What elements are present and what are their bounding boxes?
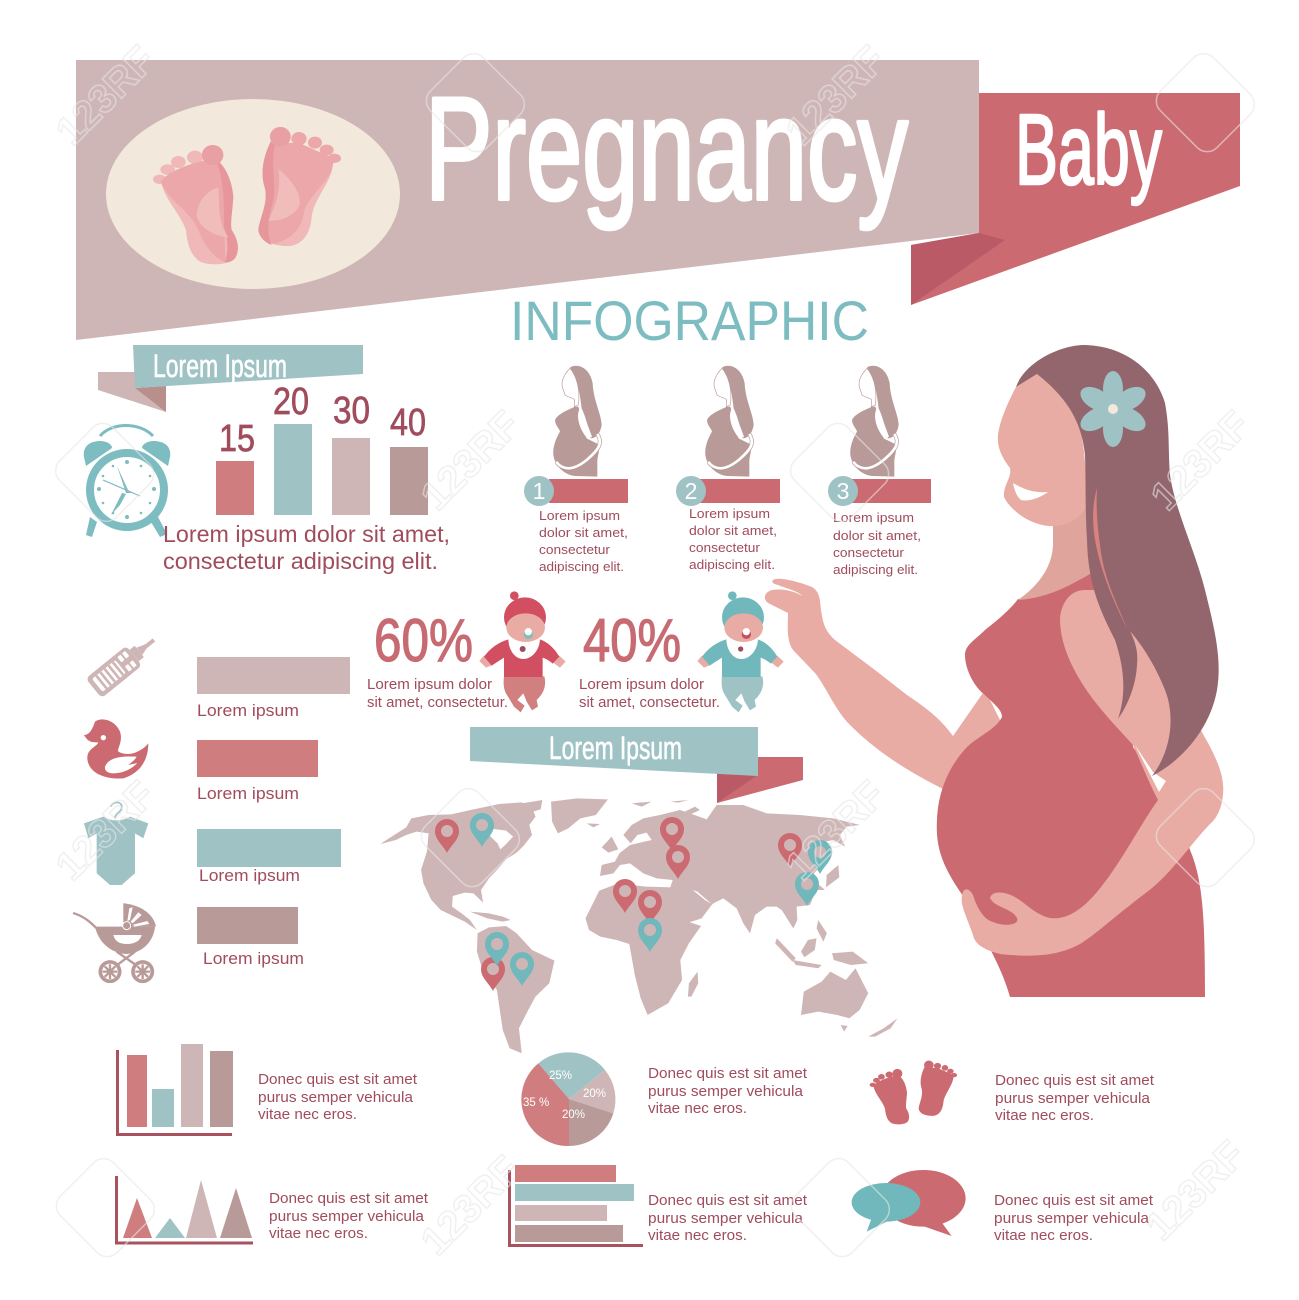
watermarks: 123RF: [1143, 403, 1259, 519]
list: baby items with bars: [74, 630, 350, 981]
step 1: 1: [533, 478, 545, 504]
back arm and hand: [962, 590, 1223, 956]
speech bubbles with text: purus semper vehicula: [994, 1211, 1150, 1227]
stat: 40 percent boy: 40%: [583, 607, 681, 674]
small bar chart with text: purus semper vehicula: [258, 1090, 414, 1106]
icon: baby boy: [697, 591, 784, 712]
step 3: Lorem ipsum: [833, 510, 914, 525]
ribbon: Lorem Ipsum over map: [470, 727, 803, 803]
horizontal bar chart with text: Donec quis est sit amet: [648, 1193, 807, 1209]
icon: baby feet in oval: [106, 99, 400, 289]
smile: [1013, 483, 1048, 501]
step 2: 2: [685, 478, 697, 504]
text: lorem caption: [163, 521, 450, 574]
step 1: [524, 366, 628, 574]
world map with pins: [380, 798, 898, 1053]
ribbon: Lorem Ipsum top left: Lorem Ipsum: [153, 348, 287, 384]
map: eurasia: [587, 800, 860, 933]
small feet with text: Donec quis est sit amet: [995, 1073, 1154, 1089]
step 2: consectetur: [689, 540, 761, 555]
small bar chart with text: vitae nec eros.: [258, 1107, 357, 1123]
stat: 40 percent boy: [579, 591, 784, 712]
list: baby items with bars: Lorem ipsum: [203, 950, 304, 968]
icon: baby girl: [479, 591, 566, 712]
small bar chart with text: [118, 1044, 417, 1134]
text: lorem caption: consectetur adipiscing elit.: [163, 548, 438, 574]
speech bubbles with text: [852, 1170, 1153, 1244]
small feet with text: [870, 1061, 1154, 1124]
watermarks: 123RF: [1138, 1133, 1254, 1249]
dress: [937, 569, 1205, 997]
hair sliver: [1093, 488, 1127, 628]
small feet with text: vitae nec eros.: [995, 1108, 1094, 1124]
stat: 60 percent girl: 60%: [374, 607, 473, 674]
ribbon: Lorem Ipsum top left: [98, 345, 363, 412]
watermarks: 123RF: [778, 773, 894, 889]
step 3: dolor sit amet,: [833, 528, 921, 543]
triangle chart with text: purus semper vehicula: [269, 1209, 425, 1225]
step 2: Lorem ipsum: [689, 506, 770, 521]
bar chart: 15 20 30 40: 30: [333, 390, 370, 432]
map: americas, africa, oceania: [380, 798, 898, 1053]
horizontal bar chart with text: vitae nec eros.: [648, 1228, 747, 1244]
triangle chart with text: Donec quis est sit amet: [269, 1191, 428, 1207]
horizontal bar chart with text: purus semper vehicula: [648, 1211, 804, 1227]
watermarks: 123RF: [413, 1148, 529, 1264]
small feet with text: purus semper vehicula: [995, 1091, 1151, 1107]
icon: rubber duck: [84, 719, 148, 779]
pie chart with text: Donec quis est sit amet: [648, 1066, 807, 1082]
header band: Pregnancy: [76, 60, 979, 340]
icon: onesie: [84, 802, 148, 885]
illustration: pregnant woman: [765, 345, 1223, 997]
triangle chart with text: vitae nec eros.: [269, 1226, 368, 1242]
stat: 40 percent boy: Lorem ipsum dolor: [579, 677, 704, 693]
heading: INFOGRAPHIC: INFOGRAPHIC: [510, 289, 869, 352]
bar chart: 15 20 30 40: 20: [273, 381, 309, 423]
pie chart with text: [521, 1052, 807, 1146]
pie chart with text: vitae nec eros.: [648, 1101, 747, 1117]
step 2: dolor sit amet,: [689, 523, 777, 538]
step 2: [676, 366, 780, 572]
speech bubbles with text: Donec quis est sit amet: [994, 1193, 1153, 1209]
raised arm: [765, 579, 1010, 790]
step 3: 3: [837, 478, 849, 504]
step 1: dolor sit amet,: [539, 525, 628, 540]
title: Baby: Baby: [1015, 94, 1162, 206]
stat: 60 percent girl: sit amet, consectetur.: [367, 695, 508, 711]
watermarks: 123RF: [413, 403, 529, 519]
step 2: adipiscing elit.: [689, 557, 775, 572]
header ribbon: Baby: [911, 93, 1240, 305]
icon: stroller: [74, 903, 156, 981]
step 3: [828, 366, 931, 577]
face: [998, 374, 1087, 526]
stat: 60 percent girl: Lorem ipsum dolor: [367, 677, 492, 693]
pins: [435, 813, 832, 991]
ribbon: Lorem Ipsum over map: Lorem Ipsum: [549, 730, 682, 766]
pie chart with text: 20%: [583, 1088, 606, 1100]
pie chart with text: 20%: [562, 1109, 585, 1121]
title: Pregnancy: Pregnancy: [425, 67, 908, 230]
step 1: adipiscing elit.: [539, 559, 624, 574]
pie chart with text: 25%: [549, 1070, 572, 1082]
watermarks: 123RF: [48, 773, 164, 889]
pie chart with text: 35 %: [523, 1097, 549, 1109]
step 3: consectetur: [833, 545, 905, 560]
pie chart with text: purus semper vehicula: [648, 1084, 804, 1100]
hair: [1016, 345, 1219, 776]
neck: [1018, 470, 1100, 600]
watermarks: 123RF: [778, 38, 894, 154]
step 1: consectetur: [539, 542, 611, 557]
icon: alarm clock: [84, 426, 170, 537]
icon: bottle: [86, 630, 162, 698]
list: baby items with bars: Lorem ipsum: [197, 702, 299, 720]
list: baby items with bars: Lorem ipsum: [197, 785, 299, 803]
stat: 40 percent boy: sit amet, consectetur.: [579, 695, 720, 711]
small bar chart with text: Donec quis est sit amet: [258, 1072, 417, 1088]
stat: 60 percent girl: [367, 591, 566, 712]
step 3: adipiscing elit.: [833, 562, 918, 577]
bar chart: 15 20 30 40: [216, 381, 428, 515]
speech bubbles with text: vitae nec eros.: [994, 1228, 1093, 1244]
triangle chart with text: [116, 1176, 428, 1243]
bar chart: 15 20 30 40: 40: [390, 402, 426, 444]
bar chart: 15 20 30 40: 15: [219, 418, 255, 460]
watermarks: 123RF: [48, 38, 164, 154]
step 1: Lorem ipsum: [539, 508, 620, 523]
list: baby items with bars: Lorem ipsum: [199, 867, 300, 885]
horizontal bar chart with text: [510, 1165, 807, 1246]
text: lorem caption: Lorem ipsum dolor sit amet,: [163, 521, 450, 547]
icon: flower: [1076, 371, 1150, 447]
